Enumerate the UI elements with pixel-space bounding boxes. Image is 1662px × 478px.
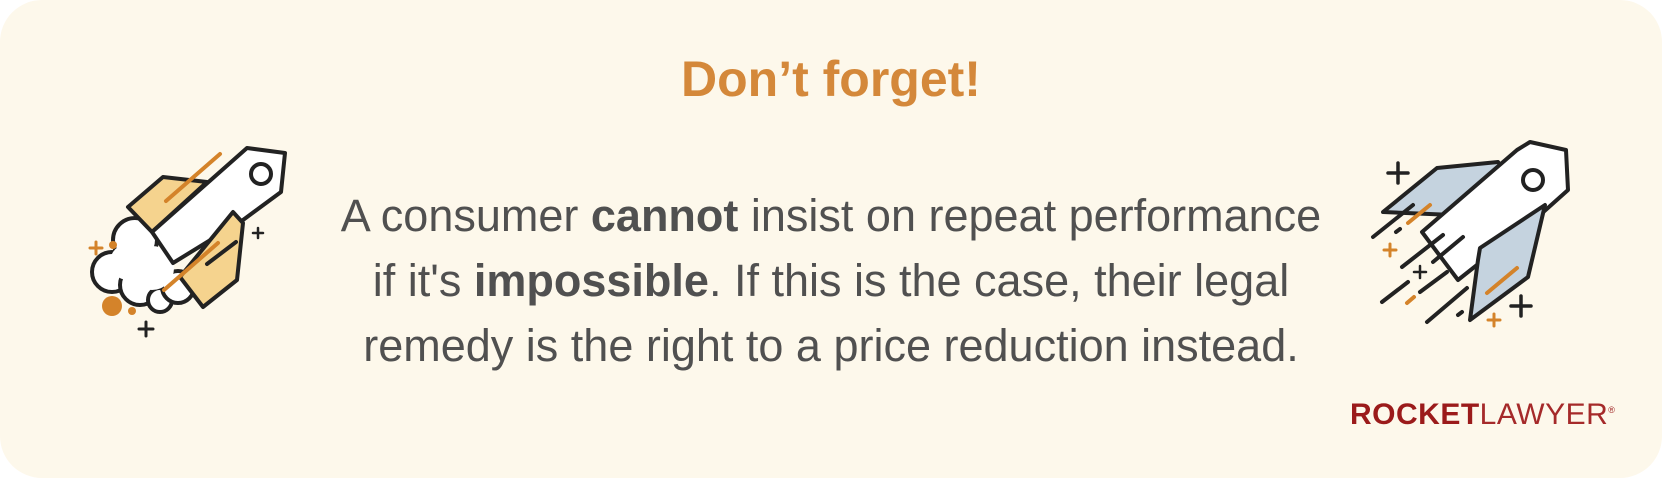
body text: A consumer cannot insist on repeat performance xyxy=(341,190,1321,241)
body text: if it's impossible. If this is the case, their legal xyxy=(373,255,1289,306)
body text xyxy=(340,190,1321,371)
logo: ROCKETLAWYER® xyxy=(1350,398,1615,431)
title: Don’t forget! xyxy=(681,51,981,107)
cloud xyxy=(92,218,194,312)
body text: remedy is the right to a price reduction instead. xyxy=(363,320,1299,371)
